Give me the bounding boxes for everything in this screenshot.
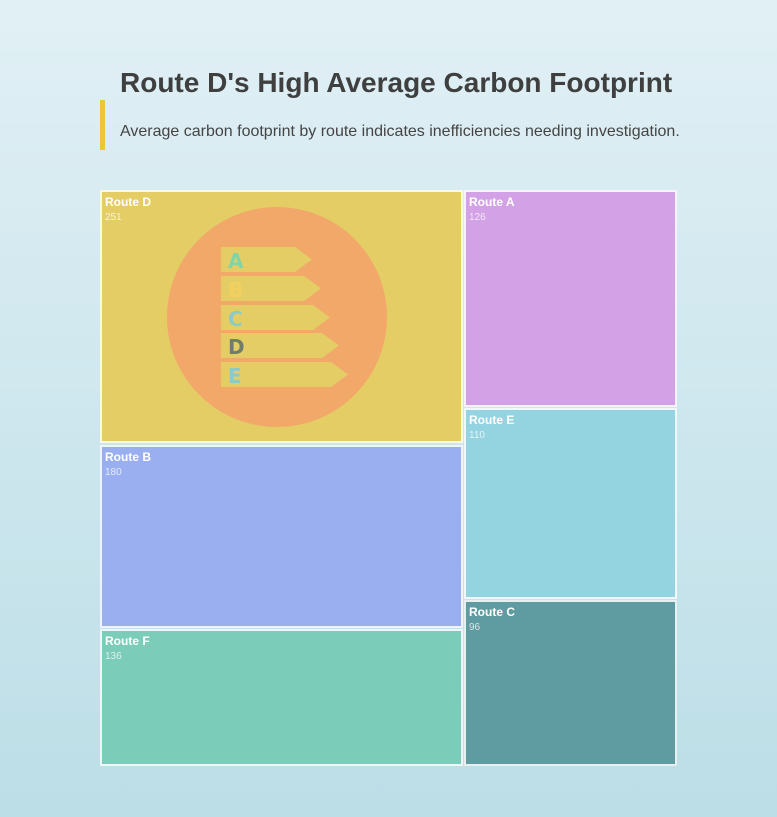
- tile: Route B: Route B: [105, 450, 151, 464]
- subtitle: Average carbon footprint by route indicates inefficiencies needing investigation.: [120, 123, 680, 140]
- icon: energy rating: A: [228, 249, 244, 273]
- tile: Route E: [464, 408, 677, 599]
- title: Route D's High Average Carbon Footprint: [120, 67, 672, 98]
- tile: Route D: Route D: [105, 195, 151, 209]
- tile: Route F: Route F: [105, 634, 150, 648]
- icon: energy rating: E: [228, 364, 242, 388]
- icon: energy rating: D: [228, 335, 245, 359]
- tile: Route C: Route C: [469, 605, 515, 619]
- tile: Route C: [464, 600, 677, 766]
- tile: Route D: 251: [105, 212, 122, 223]
- tile: Route E: 110: [469, 430, 485, 441]
- icon: energy rating: B: [228, 278, 243, 302]
- tile: Route B: 180: [105, 467, 122, 478]
- tile: Route F: 136: [105, 651, 122, 662]
- tile: Route A: 126: [469, 212, 486, 223]
- tile: Route D: [100, 190, 463, 443]
- icon: energy rating: [167, 207, 387, 427]
- accent bar: [100, 100, 105, 150]
- tile: Route A: Route A: [469, 195, 515, 209]
- tile: Route B: [100, 445, 463, 628]
- tile: Route C: 96: [469, 622, 480, 633]
- tile: Route F: [100, 629, 463, 766]
- tile: Route A: [464, 190, 677, 407]
- tile: Route E: Route E: [469, 413, 514, 427]
- icon: energy rating: C: [228, 307, 243, 331]
